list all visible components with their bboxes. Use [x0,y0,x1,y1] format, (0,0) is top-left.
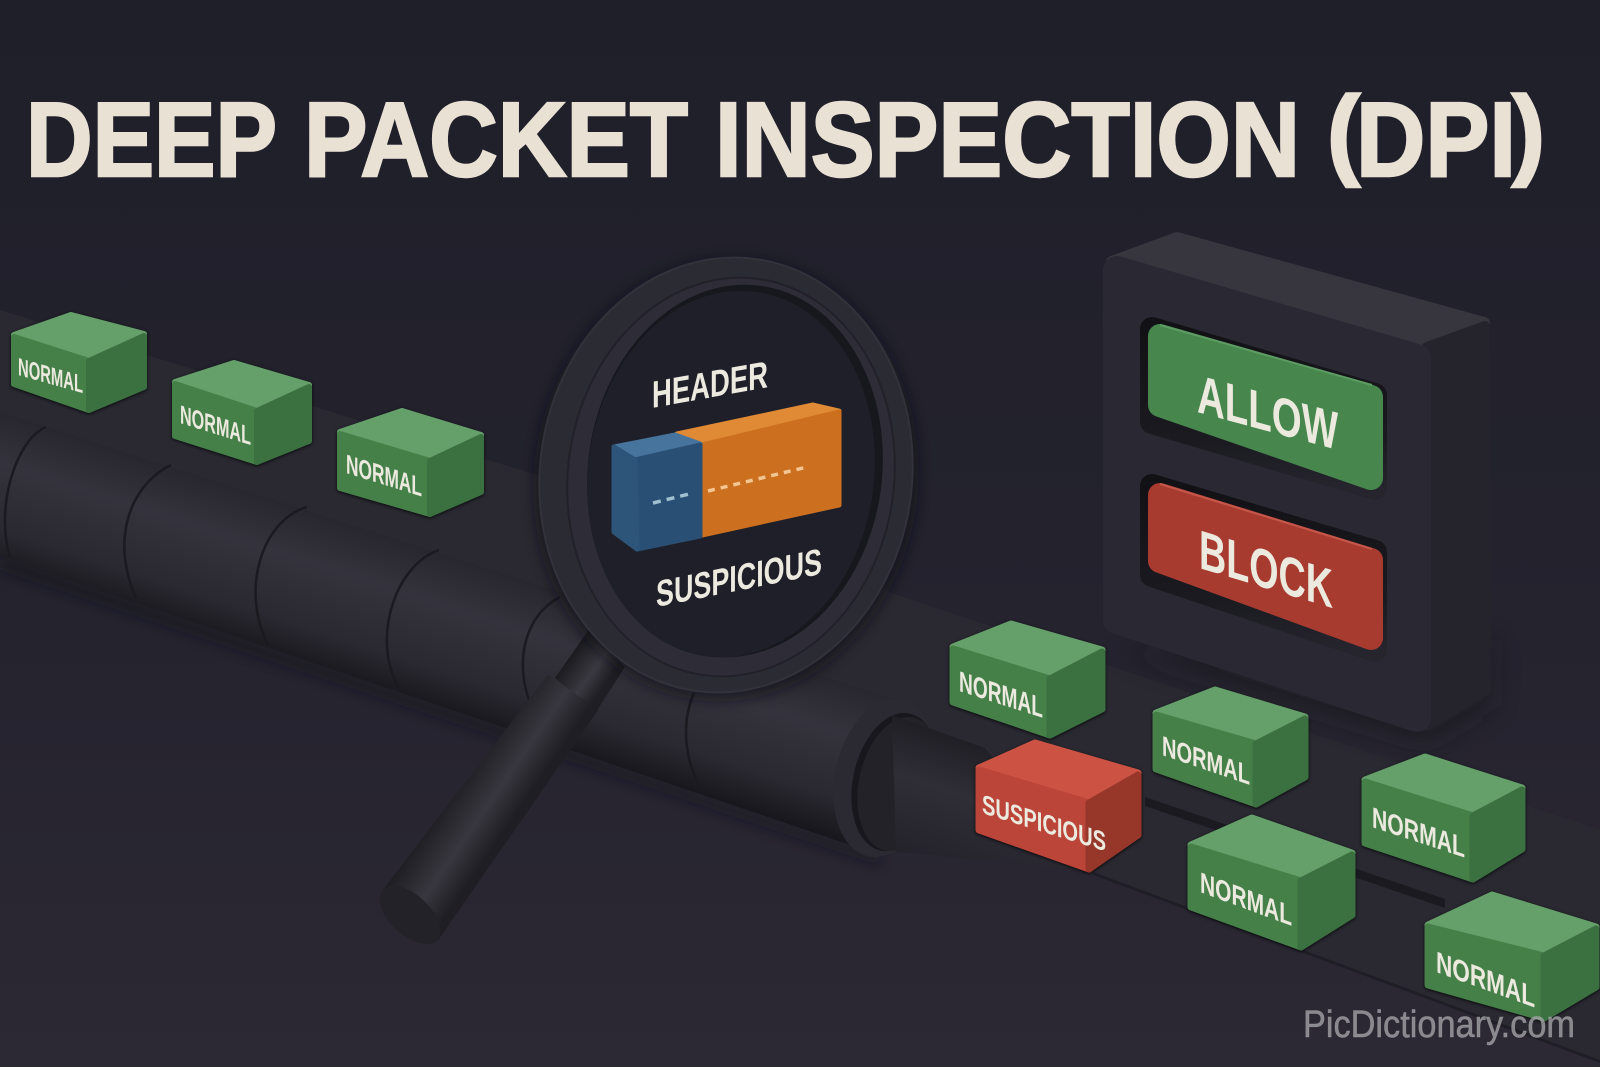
packet: normal 1 [14,315,144,410]
lens label: header: HEADER [652,353,768,417]
allow button [1160,325,1372,478]
lens face [564,272,898,676]
packet: normal 4 [953,624,1102,735]
packet: normal 4: NORMAL [959,666,1043,725]
handle end cap [369,875,451,955]
conveyor belt [0,310,1600,1063]
lens shadow crescent [563,265,907,677]
block well [1152,486,1375,650]
packet: normal 7 [1191,818,1352,947]
title: DEEP [26,81,277,199]
title [26,76,1545,199]
packet: normal 6 [1365,757,1522,879]
title: DPI [1356,81,1516,199]
packet: normal 2 [175,363,309,462]
packet: normal 2: NORMAL [180,400,251,451]
magnifying glass handle [369,628,625,955]
allow button: ALLOW [1197,363,1338,462]
magnifying glass lens [505,233,947,727]
action panel [1112,238,1492,745]
title: ) [1512,76,1545,188]
panel front face [1117,270,1417,718]
packet: normal 1: NORMAL [18,353,83,399]
block button: BLOCK [1199,518,1333,620]
title: ( [1327,76,1361,188]
data pipe [0,412,1089,870]
pipe flange [819,689,1089,870]
lens inner ring [542,256,920,698]
packet: normal 3 [340,411,481,514]
packet cross-section [614,405,839,549]
packet: normal 5 [1156,690,1305,804]
packet: normal 3: NORMAL [346,449,422,502]
packet: normal 6: NORMAL [1372,802,1465,865]
lens outer rim [511,233,941,717]
lens label: suspicious: SUSPICIOUS [656,540,822,615]
packet: normal 8 [1428,895,1596,1018]
packet: normal 8: NORMAL [1436,945,1535,1014]
title: PACKET [304,81,688,199]
packet: suspicious: SUSPICIOUS [982,789,1106,857]
panel top face [1112,238,1484,347]
panel right face [1427,326,1486,726]
watermark: PicDictionary.com [1303,1004,1575,1046]
packet: normal 7: NORMAL [1200,867,1292,933]
allow well [1152,329,1375,488]
title: INSPECTION [715,81,1300,199]
packet: normal 5: NORMAL [1162,731,1250,792]
packet: suspicious [979,743,1138,869]
block button [1160,484,1372,638]
